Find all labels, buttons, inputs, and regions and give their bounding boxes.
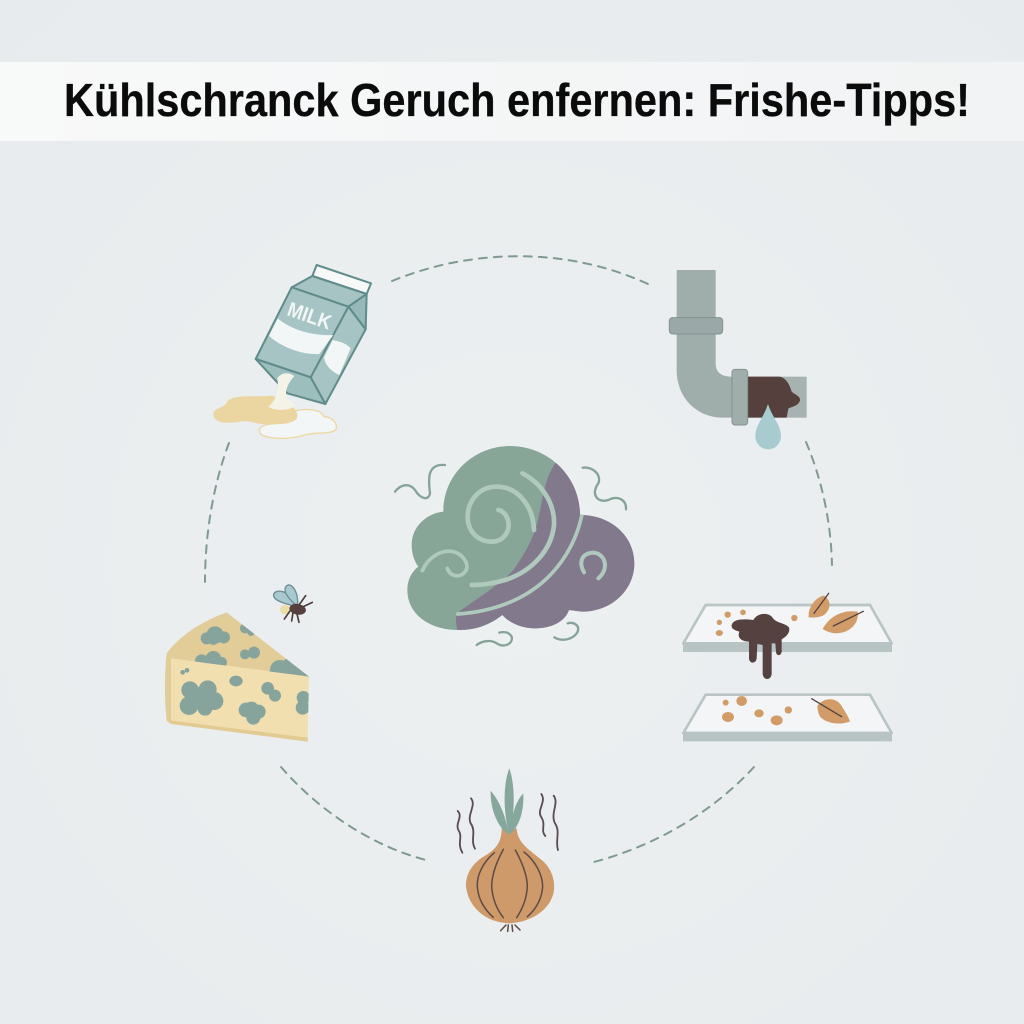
legs <box>284 596 312 622</box>
crumbs <box>716 609 797 725</box>
swirls <box>422 473 605 614</box>
body <box>289 603 307 616</box>
sludge spill <box>732 614 789 679</box>
carton <box>256 265 371 404</box>
odor squiggles <box>395 465 626 645</box>
milk stream <box>268 373 294 410</box>
flanges <box>669 318 723 334</box>
upper shelf <box>683 605 892 652</box>
pipe outlet <box>748 377 807 418</box>
sprout <box>491 768 523 835</box>
icon: dirty shelves <box>683 593 892 741</box>
mold front <box>180 668 310 725</box>
mold top <box>195 623 310 680</box>
onion bulb <box>466 828 554 923</box>
wings <box>274 591 294 606</box>
icon: fly <box>274 585 312 622</box>
cheese body <box>165 612 309 742</box>
icon: moldy cheese <box>165 612 310 742</box>
milk puddle <box>213 396 336 438</box>
cloud purple side <box>456 462 634 630</box>
dashed cycle ring <box>205 256 832 863</box>
pipe body <box>677 270 732 418</box>
water drop <box>755 404 781 449</box>
carton stripes <box>269 318 333 354</box>
icon: odor cloud <box>395 446 634 645</box>
sludge <box>748 377 800 418</box>
onion lines <box>477 849 543 931</box>
leaves <box>809 596 858 724</box>
title band <box>0 62 1024 141</box>
icon: spilled milk carton <box>213 265 371 438</box>
cloud green side <box>407 446 634 630</box>
icon: onion with smell lines <box>458 768 558 931</box>
leaf veins <box>812 593 863 717</box>
smell lines <box>458 794 558 853</box>
carton label: MILK <box>284 298 334 334</box>
icon: clogged pipe <box>669 270 807 449</box>
lower shelf <box>683 695 892 741</box>
